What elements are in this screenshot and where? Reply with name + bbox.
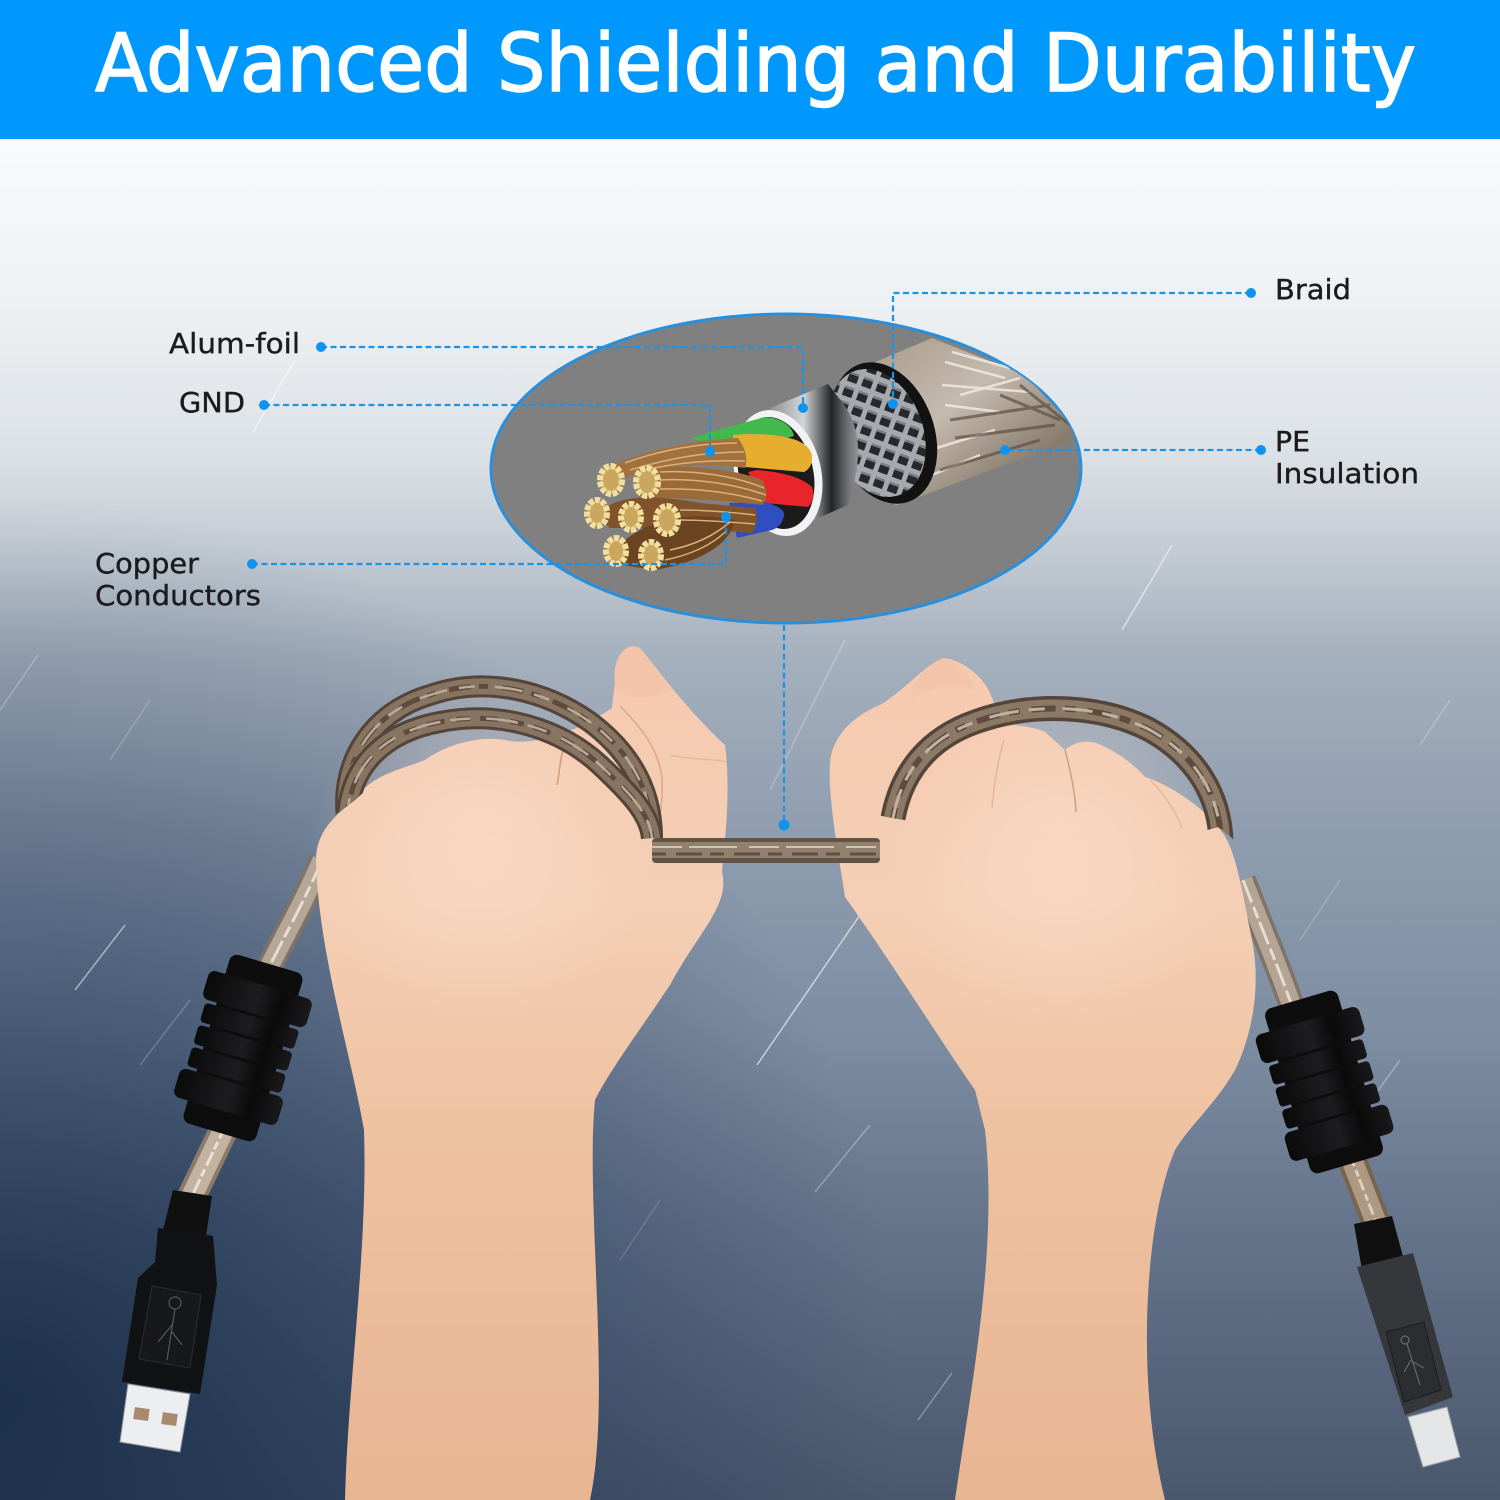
USB type-A plug bbox=[120, 1190, 217, 1452]
title: Advanced Shielding and Durability bbox=[95, 17, 1416, 110]
cable section: left lower cable bbox=[190, 860, 322, 1200]
plug body bbox=[1357, 1253, 1453, 1415]
aluminium foil bbox=[770, 384, 858, 526]
left hand bbox=[310, 646, 728, 1500]
white rim bbox=[721, 400, 835, 546]
label: Copper Conductors: Conductors bbox=[95, 579, 261, 612]
PE insulation bbox=[868, 338, 1082, 506]
cable loop: right hand bbox=[893, 709, 1221, 842]
yellow wire bbox=[733, 434, 812, 472]
usb symbol bbox=[1401, 1336, 1424, 1385]
finger creases bbox=[557, 706, 727, 835]
strain relief bbox=[163, 1190, 212, 1236]
ferrite choke right bbox=[1248, 984, 1400, 1180]
usb symbol bbox=[158, 1297, 182, 1360]
red wire bbox=[748, 470, 813, 507]
metal shell bbox=[120, 1384, 190, 1452]
thumb tip tint bbox=[615, 646, 672, 698]
ferrite choke left bbox=[166, 948, 320, 1148]
header banner bbox=[0, 0, 1500, 139]
cable loops: left hand bbox=[346, 686, 652, 838]
braid shield bbox=[811, 355, 943, 511]
label: PE Insulation bbox=[1275, 425, 1419, 490]
collar bbox=[812, 347, 956, 519]
callout leader lines bbox=[252, 293, 1261, 825]
conductor tips bbox=[587, 466, 678, 568]
cross-section ellipse bbox=[491, 314, 1082, 623]
thumb tip tint bbox=[912, 658, 976, 700]
green wire bbox=[690, 417, 794, 452]
label: Braid: Braid bbox=[1275, 273, 1351, 306]
strain relief bbox=[1354, 1216, 1404, 1270]
blue wire bbox=[729, 502, 784, 538]
stretched centre cable bbox=[652, 838, 880, 863]
coloured wires bbox=[690, 417, 813, 538]
right hand bbox=[830, 658, 1256, 1500]
callout dots bbox=[247, 288, 1266, 830]
label: Copper Conductors bbox=[95, 547, 261, 612]
USB type-B plug bbox=[1354, 1216, 1460, 1467]
label: PE Insulation: PE bbox=[1275, 425, 1310, 458]
copper strands bbox=[596, 438, 766, 570]
label: PE Insulation: Insulation bbox=[1275, 457, 1419, 490]
label: GND: GND bbox=[179, 386, 245, 419]
label: Copper Conductors: Copper bbox=[95, 547, 200, 580]
finger creases bbox=[992, 740, 1182, 828]
label: Alum-foil: Alum-foil bbox=[169, 327, 300, 360]
metal shell bbox=[1408, 1407, 1460, 1467]
plug body bbox=[122, 1228, 217, 1394]
cable section: right lower cable bbox=[1243, 880, 1376, 1222]
